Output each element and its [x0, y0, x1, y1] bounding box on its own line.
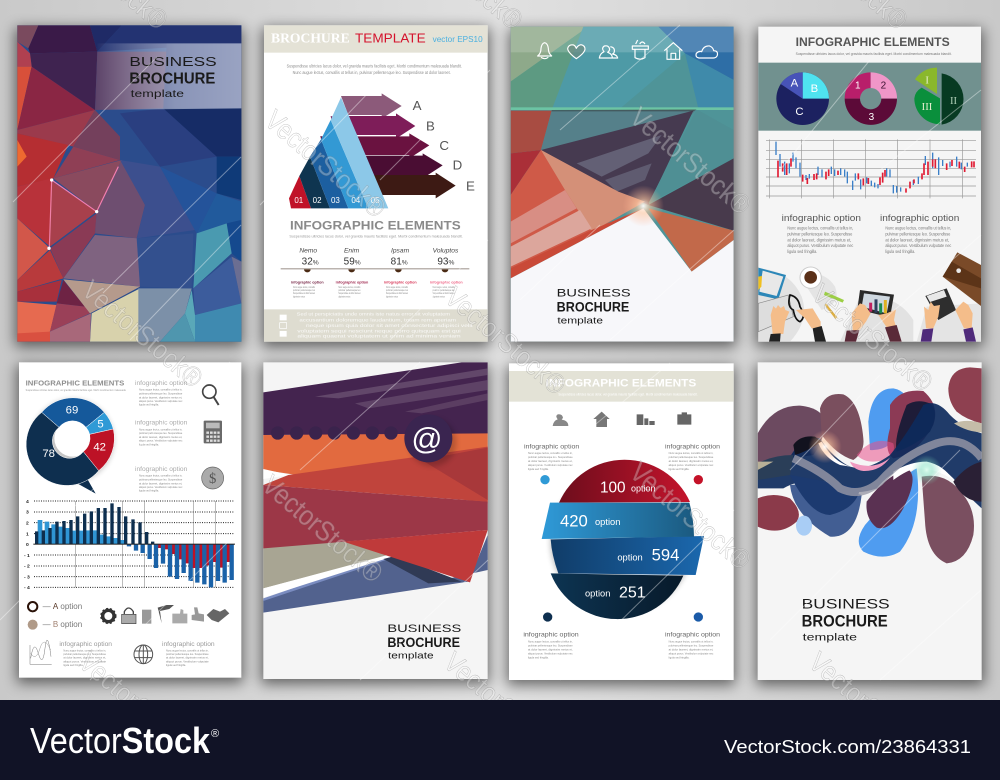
bar chart: - 2	[24, 564, 30, 570]
sleeves	[769, 325, 976, 342]
pyramid arrow chart: 04	[351, 196, 361, 205]
option text blocks: infographic option	[135, 420, 188, 427]
candlestick chart	[766, 139, 976, 198]
option columns: Nunc augue lectus, convallis	[386, 286, 409, 289]
option columns: Nunc augue lectus, convallis	[293, 286, 316, 289]
panel: pies and candlestick page	[758, 27, 981, 342]
icon: users	[553, 414, 568, 426]
icon: heart	[568, 45, 585, 59]
at-sign badge	[404, 414, 456, 466]
donut speech bubble chart	[26, 398, 114, 494]
banded circle chart: option	[585, 589, 610, 599]
option text blocks: pulvinar pellentesque leo. Suspendisse	[528, 455, 573, 459]
icon row	[538, 40, 718, 59]
bottom right option with globe: pulvinar pellentesque leo. Suspendisse	[166, 652, 209, 656]
low-poly artwork	[17, 25, 241, 342]
bottom right option with globe: Nunc augue lectus, convallis ut tellus in,	[166, 648, 209, 652]
pyramid arrow chart: 01	[294, 196, 304, 205]
option text blocks: Nunc augue lectus, convallis ut tellus in,	[139, 474, 183, 478]
watermarks: VectorStock®	[624, 456, 757, 576]
bottom right option with globe: at dolor laoreet, dignissim metus et,	[166, 656, 209, 660]
watermarks: VectorStock®	[73, 646, 206, 766]
option columns: pulvinar pellentesque leo	[338, 289, 361, 292]
panel: organic wave cover	[758, 362, 982, 680]
option text blocks: ligula sed fringilla.	[528, 655, 549, 659]
bar chart	[24, 499, 235, 591]
title: BUSINESS	[387, 623, 462, 635]
title: BROCHURE	[129, 71, 215, 88]
icon row	[101, 605, 229, 624]
bar chart: 1	[26, 531, 29, 537]
option columns: infographic option	[291, 281, 324, 285]
title: template	[388, 651, 434, 661]
option columns: pulvinar pellentesque leo	[386, 289, 409, 292]
option text right: aliquot purus. Vestibulum vulputate nec	[885, 243, 952, 248]
option text right: infographic option	[880, 213, 959, 223]
option text blocks: pulvinar pellentesque leo. Suspendisse	[139, 431, 183, 435]
banded circle chart: 251	[619, 584, 646, 601]
title: BROCHURE	[387, 634, 460, 650]
title	[129, 55, 217, 100]
section heading: INFOGRAPHIC ELEMENTS	[290, 218, 461, 232]
title	[802, 597, 890, 643]
heading: Suspendisse ultricies lacus dolor, vel gravida mauris facilisis eget. Morbi condimentum malesuada	[26, 388, 126, 392]
bottom right option with globe: infographic option	[162, 641, 215, 648]
donut chart: 1 2 3: 1	[855, 81, 861, 92]
option text blocks: ligula sed fringilla.	[139, 403, 159, 407]
percentage timeline	[281, 247, 469, 272]
bottom right option with globe: aliquot purus. Vestibulum vulputate	[166, 659, 209, 663]
desk illustration	[758, 252, 981, 342]
panel: orange and purple cover	[263, 362, 488, 679]
icon: dollar coin	[202, 467, 224, 489]
option text blocks	[135, 380, 188, 493]
option text blocks: pulvinar pellentesque leo. Suspendisse	[669, 455, 714, 459]
header band: vector EPS10	[433, 35, 483, 44]
footer band: aliquam quaerat voluptatem ut enim ad minima veniam	[297, 334, 461, 339]
icon: gear	[101, 609, 116, 623]
option text blocks: aliquot purus. Vestibulum vulputate nec	[528, 463, 573, 467]
pyramid arrow chart: D	[453, 158, 462, 173]
option columns: dignissim metus	[386, 295, 399, 298]
bar chart: 4	[26, 499, 29, 505]
heading: Suspendisse ultricies lacus dolor, vel gravida mauris facilisis eget. Morbi condimentum malesuada blandit.	[796, 51, 952, 56]
option text blocks: Nunc augue lectus, convallis ut tellus in,	[528, 451, 573, 455]
percentage timeline: 93%	[437, 256, 454, 267]
option columns: Suspendisse at dolor laoreet	[433, 292, 455, 295]
title: BROCHURE	[557, 299, 629, 315]
pie chart: A B C	[776, 72, 829, 125]
pyramid arrow chart: A	[413, 98, 422, 113]
bottom left option: ligula sed fringilla.	[63, 663, 84, 667]
icon: thumb up	[172, 609, 187, 623]
option text blocks	[523, 443, 721, 659]
title	[387, 623, 462, 661]
option text blocks: aliquot purus. Vestibulum vulputate nec	[528, 651, 573, 655]
icon: cloud	[696, 46, 718, 58]
pyramid arrow chart: 02	[313, 196, 322, 205]
footer band: neque ipsum quia dolor sit amet consectetur adipisci velit	[306, 323, 474, 328]
option text blocks: at dolor laoreet, dignissim metus et,	[139, 395, 183, 399]
option text blocks: infographic option	[524, 443, 580, 450]
icon: bars	[637, 414, 655, 425]
banded circle chart	[542, 460, 704, 619]
option text blocks: infographic option	[665, 632, 721, 639]
legend: — B option	[43, 620, 82, 629]
heading	[796, 35, 952, 56]
option text blocks: at dolor laoreet, dignissim metus et,	[669, 459, 714, 463]
watermarks: VectorStock®	[76, 274, 209, 394]
icon: card	[142, 610, 151, 624]
pie band	[758, 63, 981, 131]
option columns: Suspendisse at dolor laoreet	[338, 292, 361, 295]
header band: INFOGRAPHIC ELEMENTS	[546, 378, 696, 390]
icon: users	[599, 46, 618, 58]
header band	[509, 371, 734, 402]
percentage timeline: 32%	[302, 256, 319, 267]
icon: magnifier	[203, 385, 219, 405]
bottom right option with globe	[134, 641, 215, 667]
watermarks: VectorStock®	[624, 101, 757, 221]
icon: cup	[632, 40, 648, 59]
bar chart: 3	[26, 510, 29, 516]
option text right: ligula sed fringilla.	[885, 249, 915, 254]
pie chart: A B C: A	[791, 78, 799, 90]
pyramid arrow chart: B	[426, 119, 435, 134]
banded circle chart: option	[617, 553, 643, 563]
geometric artwork	[511, 27, 734, 342]
title: BUSINESS	[129, 55, 217, 69]
option text blocks: infographic option	[523, 632, 579, 639]
option text blocks: Nunc augue lectus, convallis ut tellus in,	[139, 388, 183, 392]
option text blocks: Nunc augue lectus, convallis ut tellus in,	[669, 451, 714, 455]
heading: INFOGRAPHIC ELEMENTS	[26, 379, 124, 388]
pie chart: A B C: B	[811, 83, 818, 95]
option columns: pulvinar pellentesque leo	[293, 289, 316, 292]
bottom left option: pulvinar pellentesque leo. Suspendisse	[63, 652, 106, 656]
option text blocks: ligula sed fringilla.	[139, 489, 159, 493]
title: template	[131, 89, 185, 100]
bottom left option: aliquot purus. Vestibulum vulputate	[63, 659, 107, 663]
option text blocks: at dolor laoreet, dignissim metus et,	[669, 647, 714, 651]
percentage timeline: 59%	[344, 256, 361, 267]
option columns: dignissim metus	[293, 295, 306, 298]
option text blocks: aliquot purus. Vestibulum vulputate nec	[139, 485, 183, 489]
title: BUSINESS	[802, 597, 890, 612]
option columns	[291, 281, 463, 298]
icon: lock	[122, 608, 136, 624]
banded circle chart: 420	[560, 511, 588, 530]
option text blocks: pulvinar pellentesque leo. Suspendisse	[139, 391, 183, 395]
option text blocks: at dolor laoreet, dignissim metus et,	[139, 435, 183, 439]
footer band	[264, 309, 488, 342]
option text blocks: pulvinar pellentesque leo. Suspendisse	[139, 477, 183, 481]
scalloped edge	[271, 426, 398, 440]
angular artwork	[263, 362, 488, 613]
option text right: Nunc augue lectus, convallis ut tellus in,	[885, 226, 951, 231]
icon: bell	[538, 43, 552, 59]
panel: donut and bar chart page	[19, 362, 241, 678]
option text blocks: aliquot purus. Vestibulum vulputate nec	[139, 399, 183, 403]
bottom left option: at dolor laoreet, dignissim metus et,	[63, 656, 106, 660]
header band: TEMPLATE	[355, 32, 426, 46]
icon: dollar coin: $	[209, 471, 216, 487]
bar chart: 2	[26, 521, 29, 527]
option columns: Suspendisse at dolor laoreet	[293, 292, 315, 295]
donut speech bubble chart: 78	[42, 448, 55, 460]
title: BUSINESS	[557, 288, 631, 300]
intro text: Suspendisse ultricies lacus dolor, vel gravida mauris facilisis eget. Morbi condimentum malesuada blandit.	[287, 64, 462, 69]
percentage timeline: Nemo	[299, 247, 317, 254]
image id: VectorStock.com/23864331	[724, 736, 971, 757]
VectorStock logo: VectorStock	[30, 720, 211, 761]
pyramid arrow chart	[289, 93, 475, 208]
option columns: pulvinar pellentesque leo	[433, 289, 455, 292]
header band: Suspendisse ultricies lacus dolor, vel gravida mauris facilisis eget. Morbi condimentum malesuada blandit.	[558, 393, 698, 397]
title	[557, 288, 631, 325]
donut speech bubble chart: 5	[97, 419, 104, 431]
pie chart: A B C: C	[795, 106, 804, 118]
option text blocks: pulvinar pellentesque leo. Suspendisse	[528, 643, 573, 647]
panel: geometric cover with icons	[511, 27, 734, 342]
header band: BROCHURE	[271, 31, 350, 46]
donut chart: 1 2 3	[845, 72, 897, 125]
option columns: Nunc augue lectus, convallis	[433, 286, 455, 289]
bottom left option: infographic option	[59, 641, 112, 648]
donut speech bubble chart: 69	[66, 405, 78, 417]
bottom left option: Nunc augue lectus, convallis ut tellus in,	[63, 648, 106, 652]
bar chart: 0	[26, 542, 29, 548]
organic blob artwork	[758, 367, 982, 563]
option text blocks: ligula sed fringilla.	[528, 467, 549, 471]
percentage timeline: Voluptos	[433, 247, 459, 254]
pie chart: roman numerals	[914, 68, 964, 125]
option columns: Suspendisse at dolor laoreet	[386, 292, 408, 295]
watermarks: VectorStock®	[803, 646, 936, 766]
option text blocks: Nunc augue lectus, convallis ut tellus in,	[528, 639, 573, 643]
option columns: dignissim metus	[433, 295, 445, 298]
panel: polygon cover brochure	[17, 25, 241, 342]
section heading	[289, 218, 463, 238]
panel: pyramid infographic page	[264, 25, 488, 342]
legend	[28, 602, 82, 630]
percentage timeline: Ipsam	[391, 247, 410, 254]
pie chart: roman numerals: I	[925, 75, 929, 86]
footer band: accusantium doloremque laudantium, totam rem aperiam	[299, 317, 457, 322]
bottom left option	[30, 640, 112, 667]
icon: tablet	[857, 290, 894, 317]
pyramid arrow chart: 03	[331, 196, 340, 205]
icon: handshake	[207, 609, 229, 622]
title: BROCHURE	[802, 612, 888, 631]
banded circle chart: option	[595, 517, 620, 527]
option text left	[782, 213, 861, 254]
colour dots	[540, 475, 703, 622]
option text blocks: at dolor laoreet, dignissim metus et,	[528, 459, 573, 463]
icon: house	[593, 412, 610, 427]
legend: — A option	[43, 602, 82, 611]
icon: calculator	[925, 288, 956, 320]
icon: calculator	[204, 421, 222, 443]
pie chart: roman numerals: III	[922, 102, 933, 113]
bar chart: - 4	[24, 585, 30, 591]
donut chart: 1 2 3: 3	[869, 112, 875, 123]
percentage timeline: 81%	[391, 256, 408, 267]
donut chart: 1 2 3: 2	[881, 81, 887, 92]
panel: banded circle page	[509, 363, 734, 680]
option text blocks: at dolor laoreet, dignissim metus et,	[528, 647, 573, 651]
intro text: Nunc augue lectus, convallis ut tellus in, pulvinar pellentesque leo. Suspendisse at dolor laoreet.	[293, 70, 451, 75]
pie chart: roman numerals: II	[950, 96, 958, 107]
hands	[771, 302, 973, 334]
banded circle chart: option	[631, 484, 655, 494]
option text left: ligula sed fringilla.	[787, 249, 817, 254]
icon: flags	[158, 605, 174, 623]
option text left: at dolor laoreet, dignissim metus et,	[787, 237, 851, 242]
watermarks: VectorStock®	[438, 646, 571, 766]
banded circle chart: 594	[652, 546, 679, 565]
option text blocks: ligula sed fringilla.	[669, 467, 690, 471]
intro text	[287, 64, 462, 75]
option text blocks: ligula sed fringilla.	[139, 442, 159, 446]
title: template	[803, 632, 857, 643]
option text blocks: aliquot purus. Vestibulum vulputate nec	[669, 651, 714, 655]
percentage timeline: Enim	[344, 247, 360, 254]
option columns: dignissim metus	[338, 295, 351, 298]
pyramid arrow chart: C	[439, 138, 449, 153]
header band	[264, 25, 488, 53]
option text left: Nunc augue lectus, convallis ut tellus in,	[787, 226, 853, 231]
footer band: Sed ut perspiciatis unde omnis iste natus error sit voluptatem	[297, 312, 451, 317]
footer bar	[0, 700, 1000, 780]
option columns: Nunc augue lectus, convallis	[338, 286, 361, 289]
option text right: at dolor laoreet, dignissim metus et,	[885, 237, 949, 242]
icon: briefcase	[677, 412, 691, 425]
option text left: infographic option	[782, 213, 861, 223]
option text blocks: ligula sed fringilla.	[669, 655, 690, 659]
watermarks: VectorStock®	[259, 104, 392, 224]
title: template	[557, 315, 603, 325]
heading	[26, 379, 126, 392]
pyramid arrow chart: 05	[371, 196, 380, 205]
banded circle chart: 100	[600, 480, 626, 497]
option text left: aliquot purus. Vestibulum vulputate nec	[787, 243, 854, 248]
option columns: infographic option	[384, 281, 417, 285]
watermarks: VectorStock®	[806, 278, 939, 398]
heading: INFOGRAPHIC ELEMENTS	[796, 35, 950, 49]
option text blocks: infographic option	[665, 443, 721, 450]
at-sign badge: @	[411, 422, 443, 456]
option text right	[880, 213, 959, 254]
option text blocks: Nunc augue lectus, convallis ut tellus in,	[669, 639, 714, 643]
watermarks: VectorStock®	[439, 281, 572, 401]
option text left: pulvinar pellentesque leo. Suspendisse	[787, 231, 853, 236]
icon: briefcase	[943, 252, 981, 306]
option text blocks: pulvinar pellentesque leo. Suspendisse	[669, 643, 714, 647]
donut speech bubble chart: 42	[93, 442, 106, 454]
watermarks: VectorStock®	[256, 469, 389, 589]
option text blocks: Nunc augue lectus, convallis ut tellus in,	[139, 427, 183, 431]
bar chart: - 3	[24, 574, 30, 580]
option text right: pulvinar pellentesque leo. Suspendisse	[885, 231, 951, 236]
option text blocks: aliquot purus. Vestibulum vulputate nec	[139, 439, 183, 443]
icon: pointer	[192, 607, 204, 622]
option text blocks: infographic option	[135, 380, 188, 387]
option text blocks: aliquot purus. Vestibulum vulputate nec	[669, 463, 714, 467]
icon: house	[664, 43, 682, 59]
option columns: infographic option	[430, 281, 463, 285]
option text blocks: at dolor laoreet, dignissim metus et,	[139, 481, 183, 485]
registered mark: ®	[211, 728, 219, 740]
option columns: infographic option	[336, 281, 368, 285]
section heading: Suspendisse ultricies lacus dolor, vel gravida mauris facilisis eget. Morbi condimentum malesuada blandit.	[289, 233, 463, 238]
pyramid arrow chart: E	[466, 179, 475, 194]
footer band: voluptatem sequi nesciunt neque porro quisquam est qui	[297, 328, 461, 333]
bar chart: - 1	[24, 553, 30, 559]
bottom right option with globe: ligula sed fringilla.	[166, 663, 186, 667]
option text blocks: infographic option	[135, 466, 188, 473]
